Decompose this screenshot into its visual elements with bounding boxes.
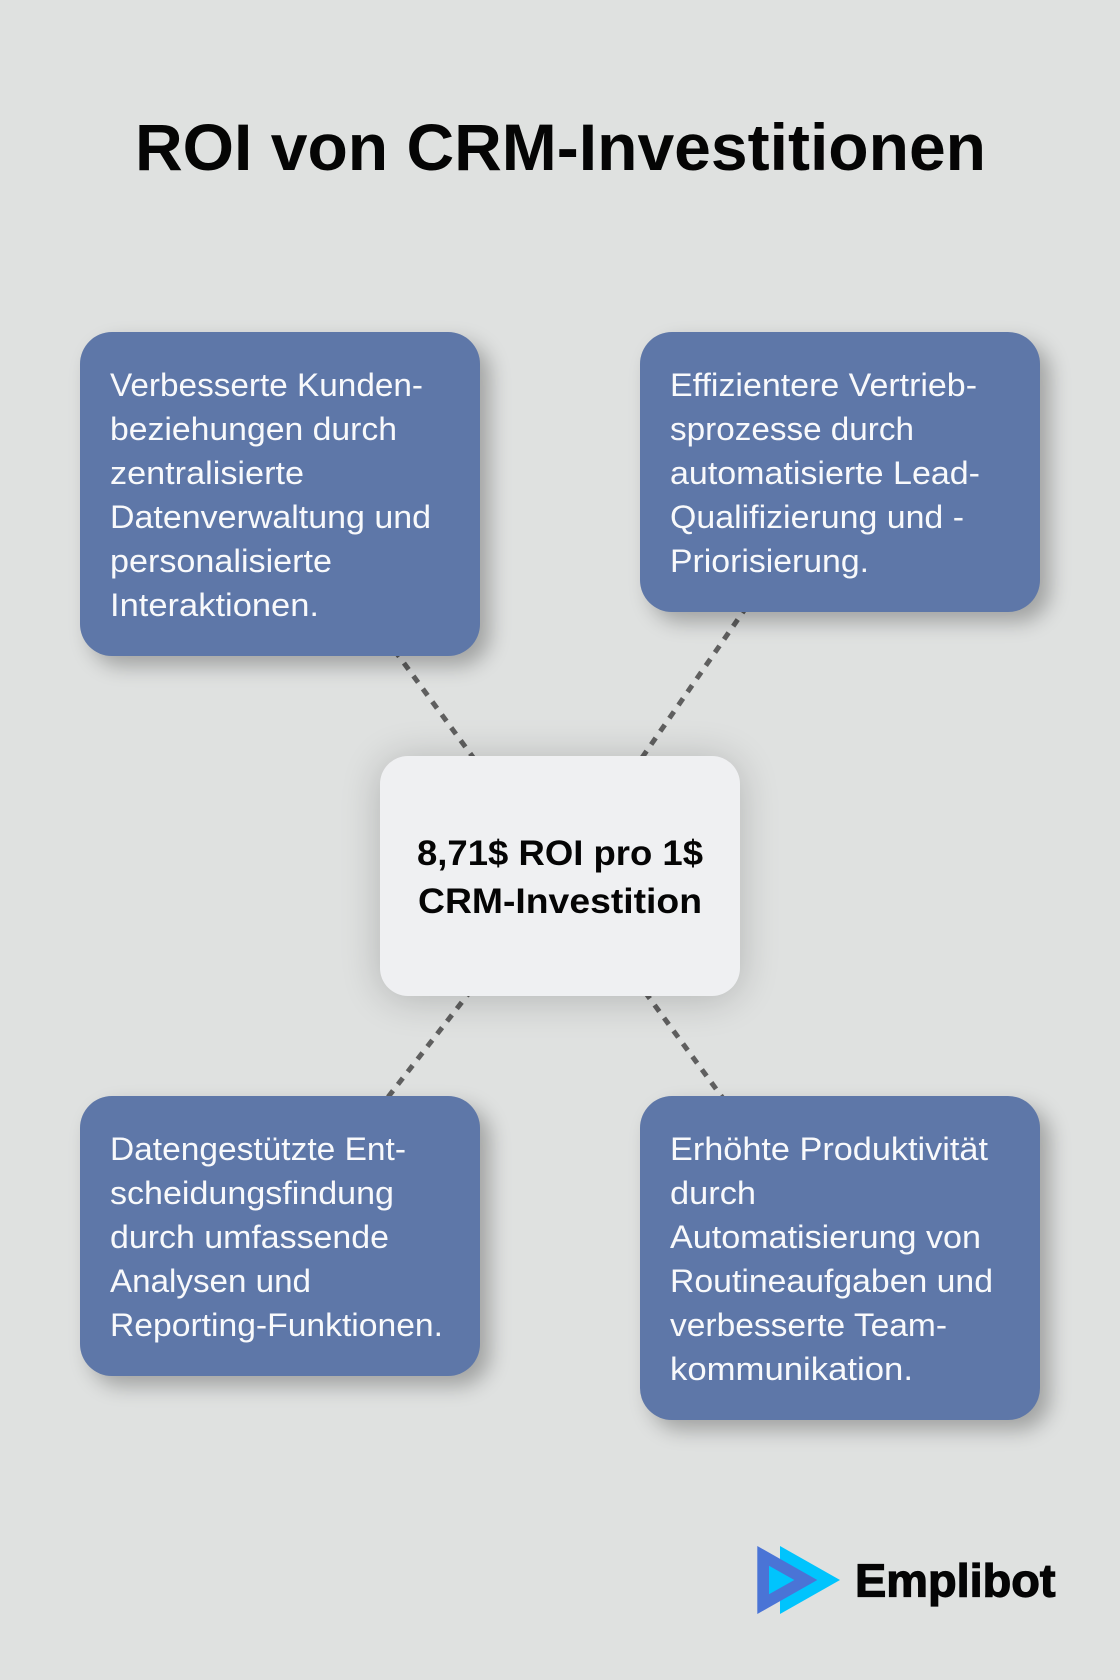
logo: Emplibot: Emplibot [855,1555,1056,1607]
panel: data-driven decisions: durch umfassende [110,1219,389,1255]
panel: productivity: Erhöhte Produktivität [670,1131,988,1167]
panel: productivity: verbesserte Team- [670,1307,947,1343]
logo: Emplibot [757,1546,1056,1614]
panel: central ROI figure [380,756,740,996]
panel: customer relationships: Datenverwaltung und [110,499,431,535]
panel: data-driven decisions [80,1096,480,1376]
panel: data-driven decisions: Analysen und [110,1263,311,1299]
panel: sales processes: sprozesse durch [670,411,914,447]
panel: central ROI figure: 8,71$ ROI pro 1$ [417,834,703,873]
panel: customer relationships: personalisierte [110,543,332,579]
panel: customer relationships: zentralisierte [110,455,304,491]
panel: data-driven decisions: Reporting-Funktionen. [110,1307,443,1343]
panel: central ROI figure: CRM-Investition [418,882,702,921]
panel: sales processes: Effizientere Vertrieb- [670,367,977,403]
panel: customer relationships: Interaktionen. [110,587,319,623]
panel: customer relationships: beziehungen durch [110,411,397,447]
panel: productivity: Automatisierung von [670,1219,981,1255]
panel: data-driven decisions: scheidungsfindung [110,1175,394,1211]
panel: sales processes: Priorisierung. [670,543,869,579]
panel: sales processes: automatisierte Lead- [670,455,980,491]
panel: productivity [640,1096,1040,1420]
title: ROI von CRM-Investitionen [135,110,986,184]
panel: productivity: kommunikation. [670,1351,913,1387]
panel: data-driven decisions: Datengestützte Ent- [110,1131,406,1167]
panel: customer relationships [80,332,480,656]
panel: sales processes: Qualifizierung und - [670,499,964,535]
panel: productivity: durch [670,1175,756,1211]
panel: sales processes [640,332,1040,612]
panel: productivity: Routineaufgaben und [670,1263,993,1299]
panel: customer relationships: Verbesserte Kunden- [110,367,423,403]
